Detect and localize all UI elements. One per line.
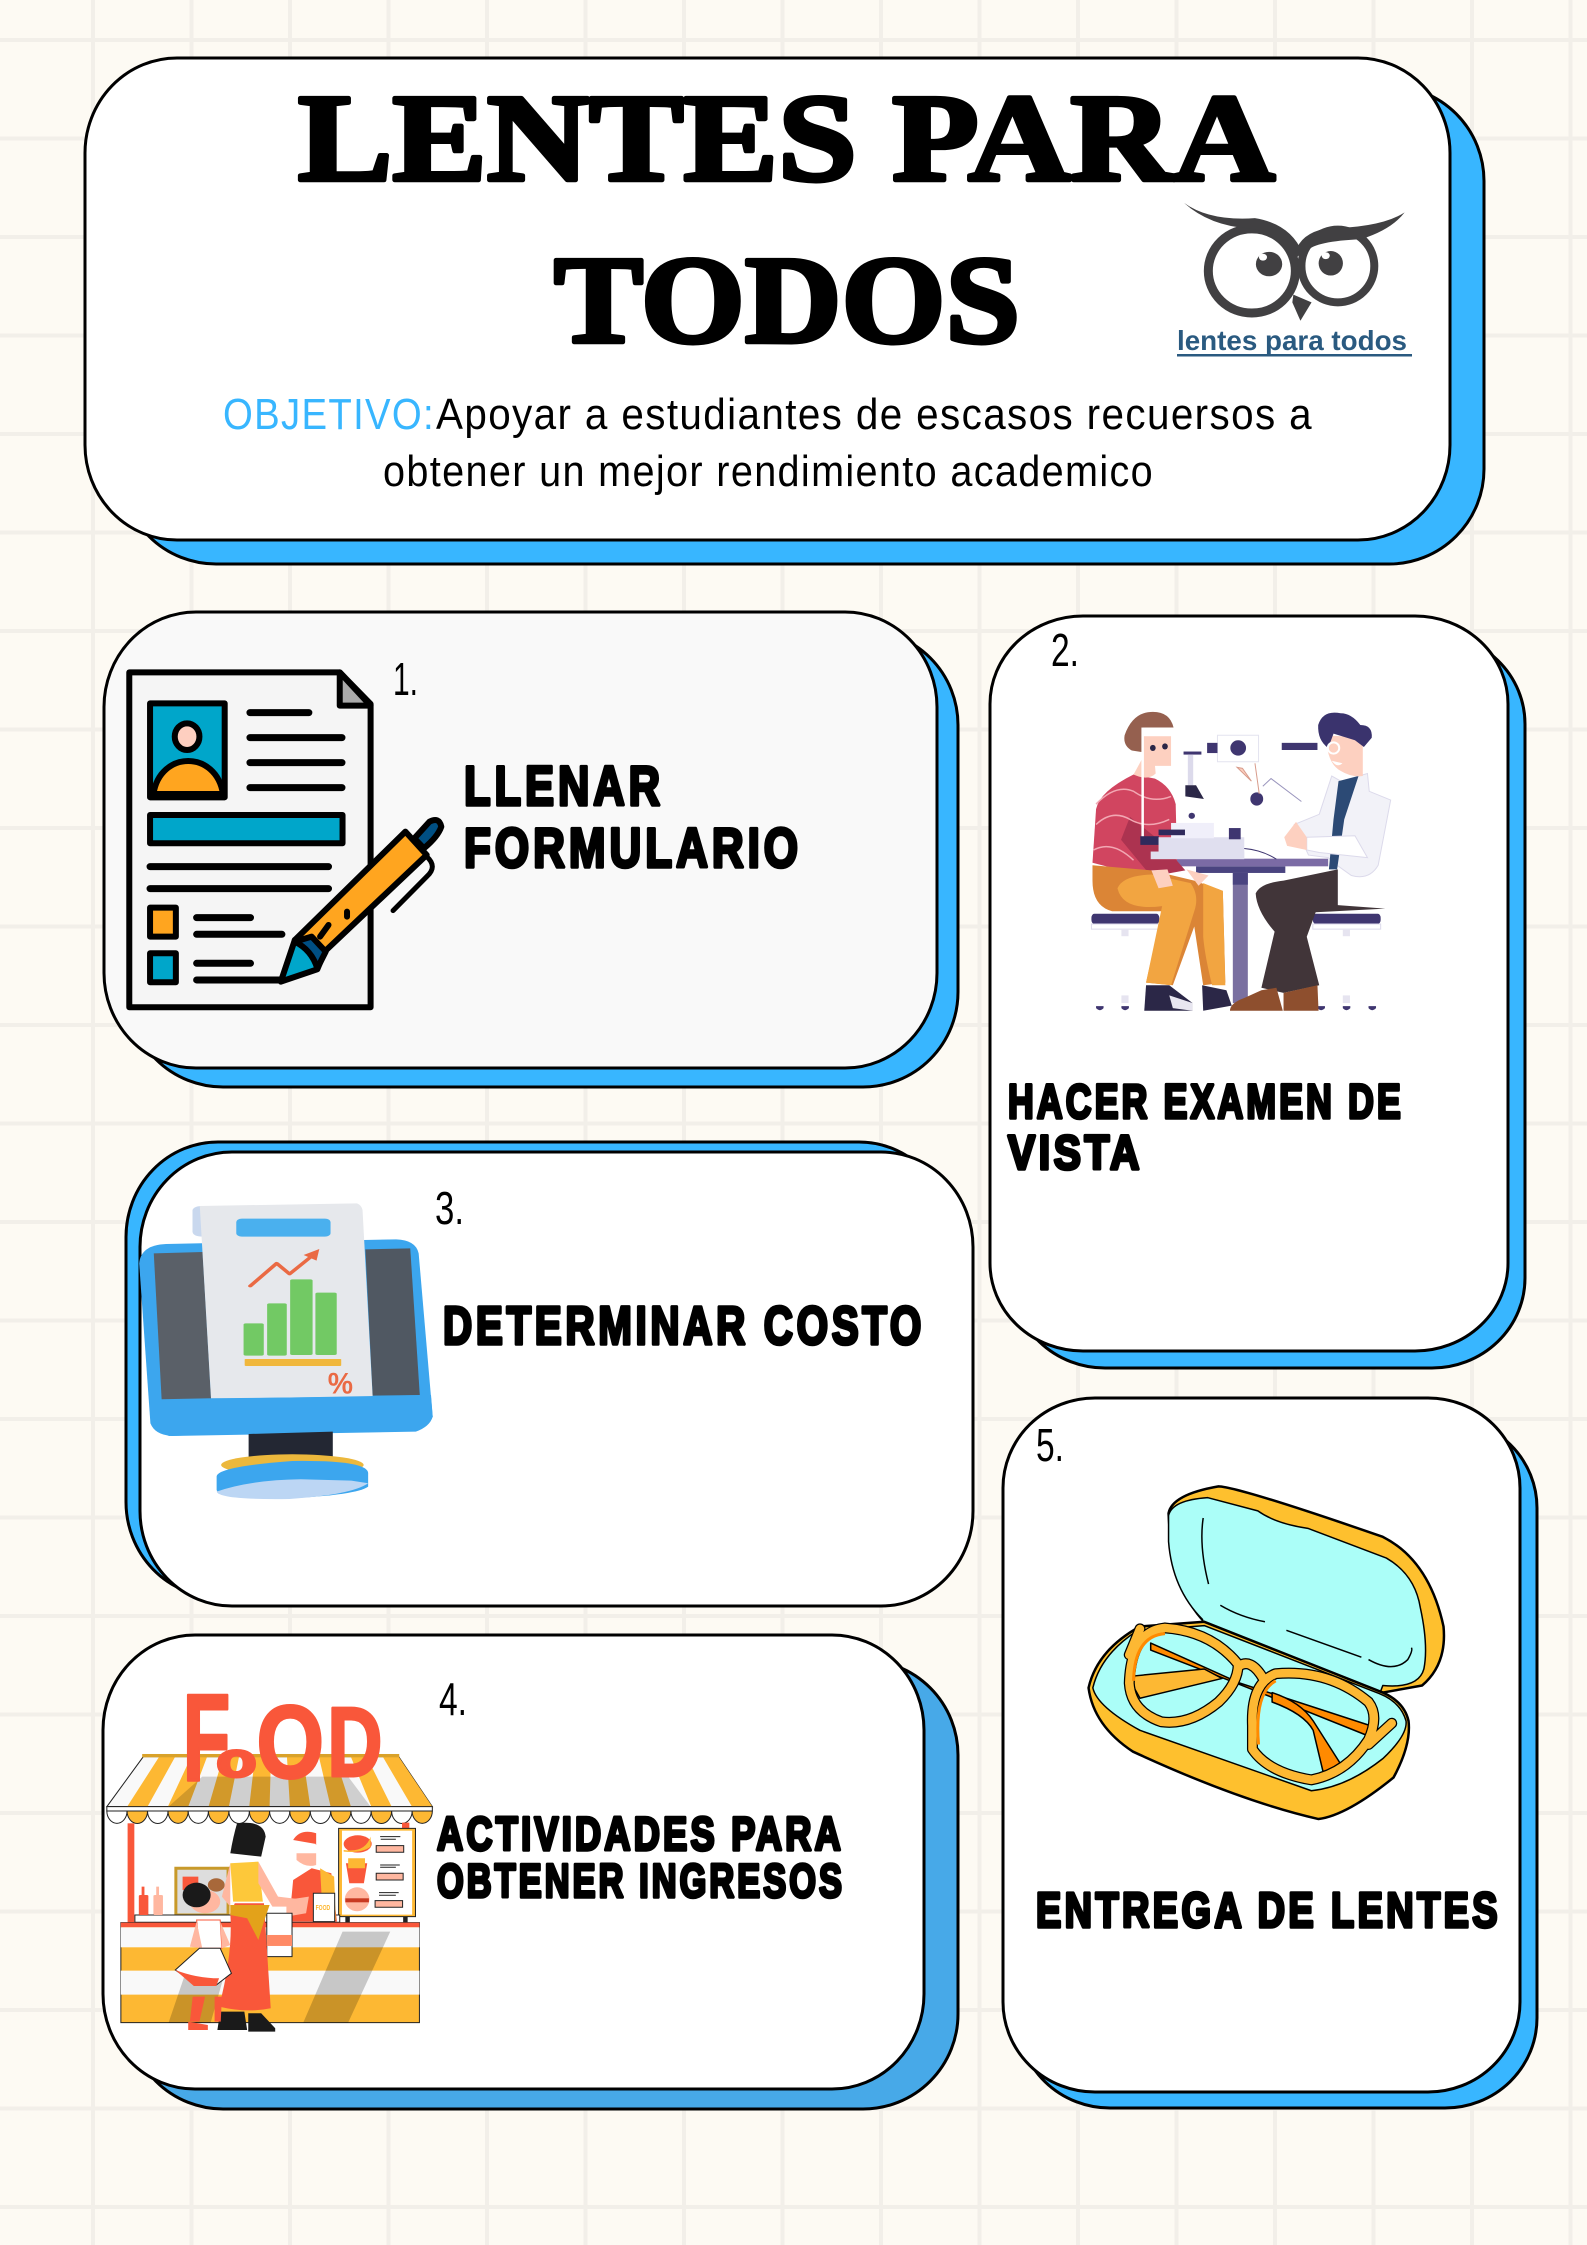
step 2 heading: VISTA xyxy=(1008,1127,1143,1180)
step 3 heading: DETERMINAR COSTO xyxy=(443,1296,925,1356)
illustration: glasses in case xyxy=(1089,1486,1444,1819)
header blue shadow xyxy=(121,86,1484,564)
lid lining xyxy=(1169,1498,1426,1695)
header card xyxy=(85,58,1450,540)
panel: step 3 determinar costo xyxy=(126,1142,973,1606)
customer child xyxy=(175,1883,231,2030)
stools xyxy=(1091,914,1381,1010)
glasses frame xyxy=(1129,1628,1392,1780)
food sign letters: F xyxy=(183,1669,230,1807)
illustration: eye exam xyxy=(1091,712,1391,1011)
shelf and bottles xyxy=(135,1868,340,1922)
food sign letters: o xyxy=(216,1733,257,1787)
title: LENTES PARA xyxy=(298,70,1275,208)
panel: header xyxy=(85,58,1484,564)
logo wordmark: lentes para todos xyxy=(1177,325,1407,356)
food sign letters xyxy=(183,1669,382,1807)
step 1 heading: FORMULARIO xyxy=(464,816,802,879)
step 1 number: 1. xyxy=(393,653,418,705)
base lining xyxy=(1093,1626,1406,1791)
menu board xyxy=(339,1828,415,1923)
step 4 number: 4. xyxy=(439,1673,467,1725)
case base xyxy=(1089,1622,1409,1819)
step 3 card xyxy=(140,1152,973,1606)
case lid xyxy=(1169,1486,1444,1693)
stall posts xyxy=(128,1823,409,1923)
step 1 shadow xyxy=(128,630,958,1087)
step 1 heading: LLENAR xyxy=(464,754,664,817)
title xyxy=(298,70,1275,370)
exam machine xyxy=(1151,735,1317,859)
step 2 number: 2. xyxy=(1051,624,1079,676)
step 2 card xyxy=(990,616,1508,1351)
illustration: food stall xyxy=(107,1669,432,2032)
illustration: monitor with chart: % xyxy=(328,1366,353,1400)
illustration: monitor with chart xyxy=(139,1203,433,1499)
step 2 heading: HACER EXAMEN DE xyxy=(1008,1076,1404,1129)
objective text: OBJETIVO: xyxy=(223,390,435,439)
glasses temples xyxy=(1133,1643,1370,1775)
food sign letters: O xyxy=(257,1684,324,1800)
step 4 card xyxy=(103,1635,924,2089)
step 5 shadow xyxy=(1018,1418,1537,2108)
step 1 heading xyxy=(464,754,802,879)
icon: owl logo xyxy=(1184,203,1405,321)
awning xyxy=(107,1754,432,1823)
step 4 heading: ACTIVIDADES PARA xyxy=(437,1807,844,1860)
step 5 number: 5. xyxy=(1036,1419,1064,1471)
vendor: FOOD xyxy=(316,1904,330,1912)
step 3 number: 3. xyxy=(435,1182,464,1234)
step 5 card xyxy=(1003,1398,1520,2092)
title: TODOS xyxy=(554,232,1020,370)
step 4 heading: OBTENER INGRESOS xyxy=(437,1854,845,1907)
objective text: Apoyar a estudiantes de escasos recuersos a xyxy=(436,390,1313,439)
patient xyxy=(1092,712,1232,1011)
customer woman xyxy=(217,1823,306,2032)
step 3 blue backing xyxy=(126,1142,951,1597)
illustration: food stall: D xyxy=(327,1687,382,1797)
table xyxy=(1126,859,1328,1003)
icon: form and pen xyxy=(129,672,441,1007)
panel: step 4 actividades para obtener ingresos xyxy=(103,1635,958,2109)
objective text xyxy=(223,390,1313,496)
panel: step 1 llenar formulario xyxy=(104,612,958,1087)
vendor xyxy=(286,1832,337,1922)
objective text: obtener un mejor rendimiento academico xyxy=(383,447,1154,496)
step 4 shadow xyxy=(128,1660,958,2109)
counter xyxy=(121,1923,419,2023)
step 1 card xyxy=(104,612,937,1068)
doctor xyxy=(1230,713,1391,1011)
step 2 heading xyxy=(1008,1076,1404,1180)
step 4 heading xyxy=(437,1807,845,1907)
step 2 shadow xyxy=(1012,634,1525,1368)
panel: step 5 entrega de lentes xyxy=(1003,1398,1537,2108)
panel: step 2 hacer examen de vista xyxy=(990,616,1525,1368)
